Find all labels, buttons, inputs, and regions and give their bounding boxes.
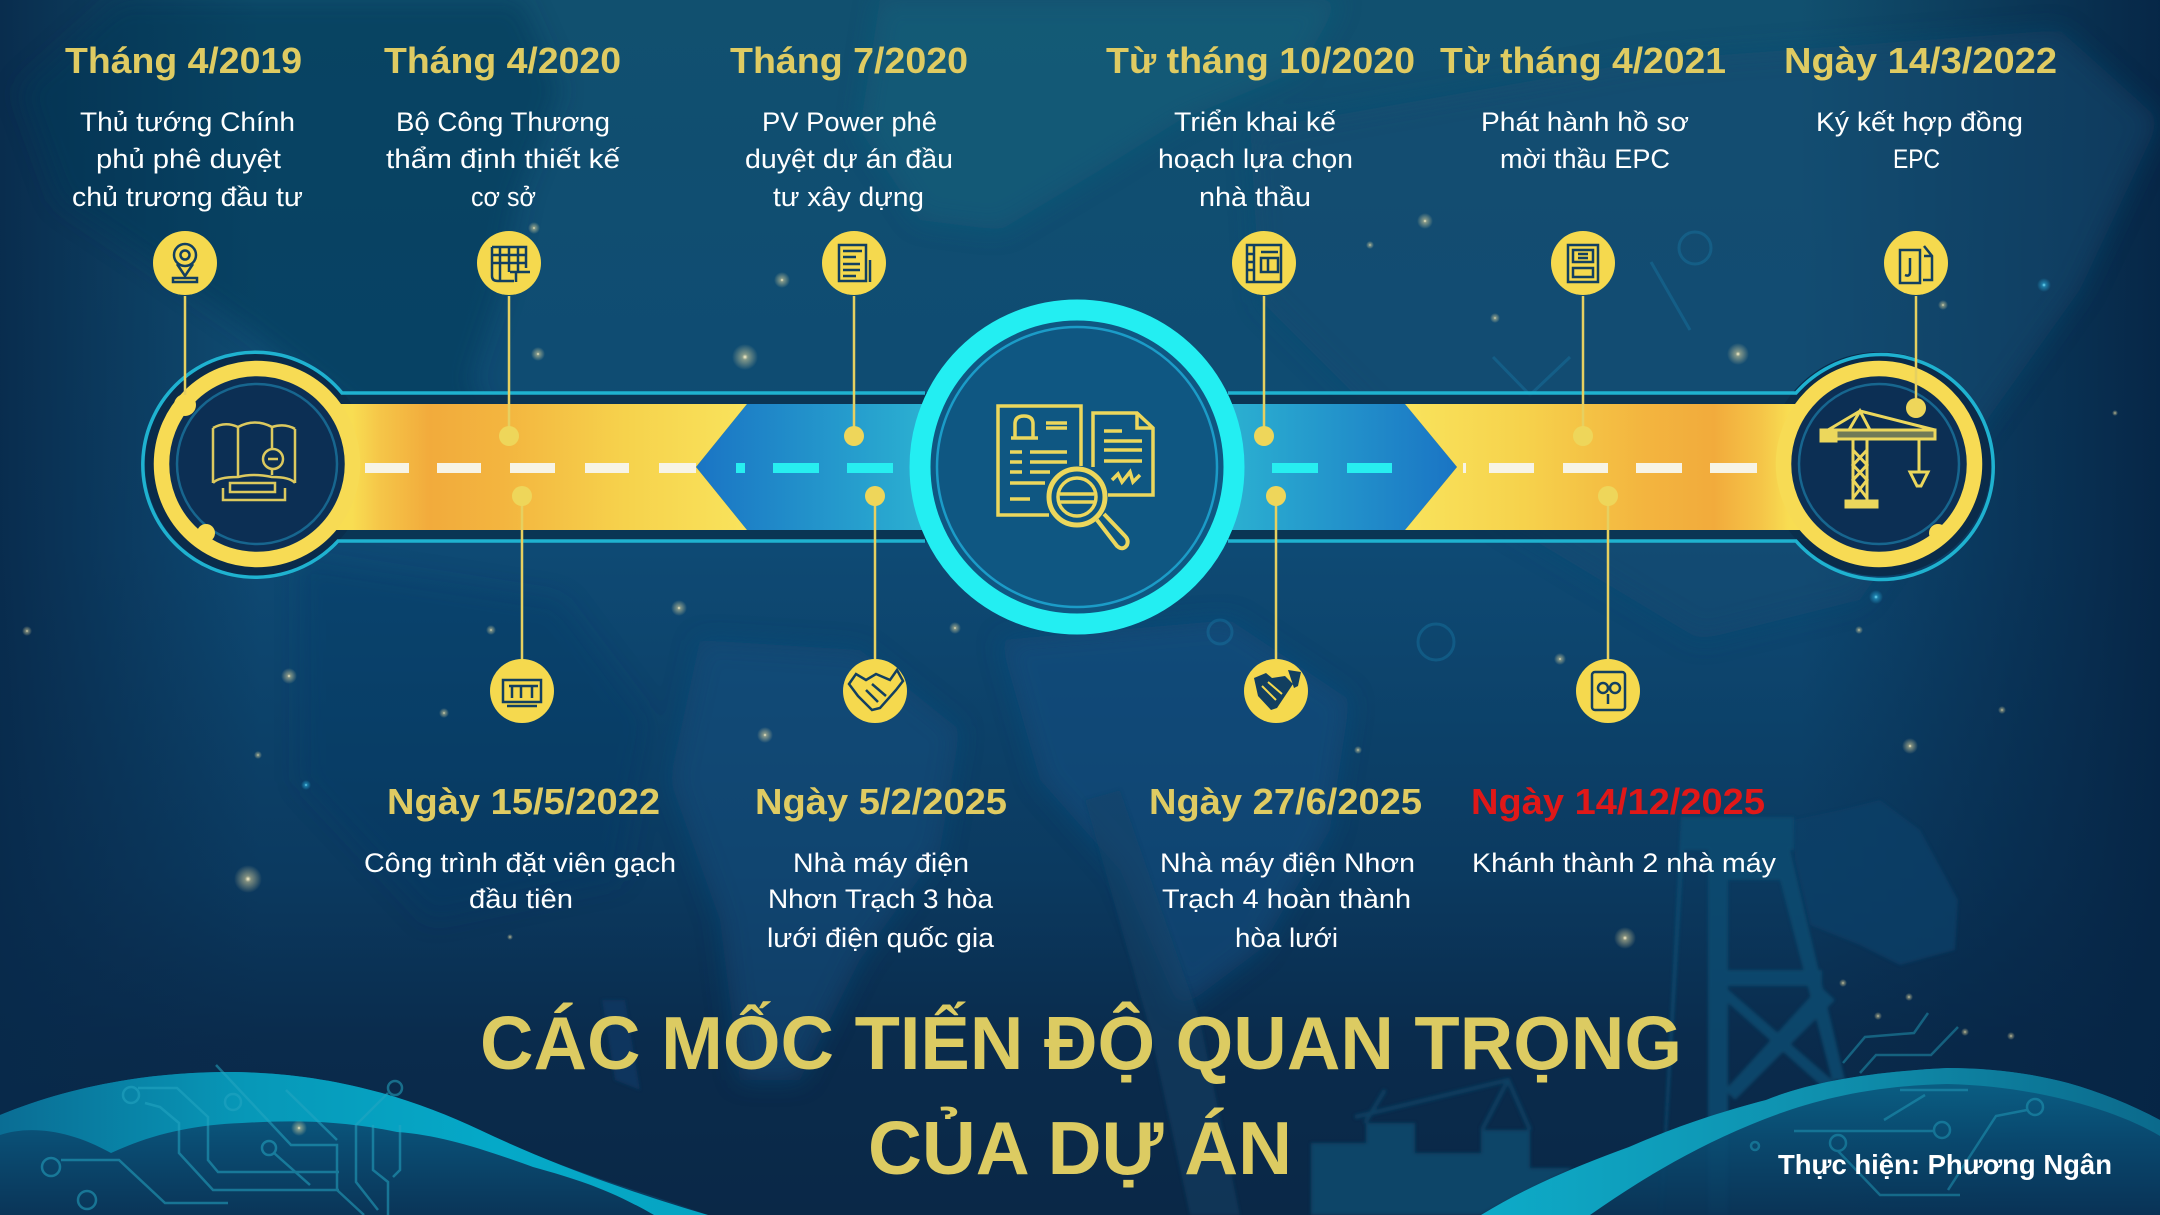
milestone: April 2020: cơ sở [471,182,536,212]
milestone: 14 March 2022 [1784,40,2057,174]
icon: tender dossier [1551,231,1615,295]
icon: map pin approval [153,231,217,295]
milestone: from April 2021 [1440,40,1726,174]
milestone: July 2020: tư xây dựng [773,182,924,212]
timeline bar [143,352,1993,580]
milestone: 14 March 2022: EPC [1893,144,1940,174]
title [480,1001,1682,1190]
milestone: 5 February 2025: Nhơn Trạch 3 hòa [768,884,993,914]
milestone: July 2020: duyệt dự án đầu [745,144,953,174]
icon: power go screen [1576,659,1640,723]
milestone: April 2019: chủ trương đầu tư [72,182,303,212]
milestone: from October 2020: nhà thầu [1199,182,1311,212]
icon: open book [213,422,295,500]
circuit lines [42,1065,402,1215]
milestone: April 2020: Bộ Công Thương [396,107,610,137]
milestone: April 2019: Thủ tướng Chính [80,107,295,137]
milestone: 14 December 2025: Ngày 14/12/2025 [1471,781,1765,822]
wave: bottom left [0,1065,708,1215]
milestone: 15 May 2022: đầu tiên [469,884,573,914]
milestone: April 2020: thẩm định thiết kế [386,144,620,174]
stars [22,213,2118,1040]
milestone: from October 2020: Triển khai kế [1174,107,1336,137]
milestone: 15 May 2022 [364,781,676,914]
left node with book icon [162,368,352,560]
icon: handshake solid [1244,659,1308,723]
central node with document icon [920,310,1234,624]
milestone: from April 2021: mời thầu EPC [1500,144,1670,174]
milestone: 5 February 2025: lưới điện quốc gia [767,923,994,953]
milestone: 14 December 2025: Khánh thành 2 nhà máy [1472,848,1777,878]
milestone: 27 June 2025 [1149,781,1422,953]
milestone: 15 May 2022: Công trình đặt viên gạch [364,848,676,878]
background decoration: australia shape [1793,800,1958,965]
milestone: 5 February 2025 [755,781,1007,953]
milestone: April 2019: phủ phê duyệt [96,144,282,174]
milestone: April 2020: Tháng 4/2020 [384,40,621,81]
wave star [291,1120,307,1136]
author credit: Thực hiện: Phương Ngân [1778,1149,2112,1180]
yellow segment right [1405,404,1805,530]
right node with crane icon [1784,368,1974,560]
city silhouette [602,790,1574,1215]
milestone: 27 June 2025: hòa lưới [1235,923,1338,953]
milestone: 27 June 2025: Ngày 27/6/2025 [1149,781,1422,822]
milestone: April 2019: Tháng 4/2019 [65,40,302,81]
milestone: 15 May 2022: Ngày 15/5/2022 [387,781,660,822]
wave: bottom right [1481,1013,2160,1215]
connector lines [185,296,1926,660]
icon: site grid plan [477,231,541,295]
icon: bidding plan [1232,231,1296,295]
yellow segment left [335,404,747,530]
milestone: from April 2021: Từ tháng 4/2021 [1440,40,1726,81]
milestone: July 2020: PV Power phê [762,107,937,137]
wave highlight band [0,1072,708,1215]
ring base discs [145,352,1991,576]
milestone: 5 February 2025: Nhà máy điện [793,848,969,878]
milestone: 5 February 2025: Ngày 5/2/2025 [755,781,1007,822]
icon: approval document [822,231,886,295]
milestone: 27 June 2025: Nhà máy điện Nhơn [1160,848,1415,878]
milestone: from October 2020 [1106,40,1415,212]
title: CỦA DỰ ÁN [868,1106,1292,1190]
icon: handshake outline [843,659,907,723]
milestone: 27 June 2025: Trạch 4 hoàn thành [1162,884,1411,914]
icon: foundation brick [490,659,554,723]
milestone: April 2020 [384,40,621,212]
background decoration: circles and strokes [1208,232,1711,660]
milestone: 14 March 2022: Ký kết hợp đồng [1816,107,2023,137]
wave highlight band [1481,1068,2160,1215]
blue arrow right [1215,404,1457,530]
milestone: from October 2020: Từ tháng 10/2020 [1106,40,1415,81]
milestone: from October 2020: hoạch lựa chọn [1158,144,1353,174]
icon: documents and magnifier [998,406,1153,548]
blue arrow left [696,404,940,530]
milestone: from April 2021: Phát hành hồ sơ [1481,107,1689,137]
milestone: July 2020 [730,40,968,212]
title: CÁC MỐC TIẾN ĐỘ QUAN TRỌNG [480,1001,1682,1085]
road dashes [365,463,1757,473]
icon: EPC contract signing [1884,231,1948,295]
outer cyan outline [143,352,1993,580]
milestone: 14 March 2022: Ngày 14/3/2022 [1784,40,2057,81]
milestone: 14 December 2025 [1471,781,1777,878]
milestone: April 2019 [65,40,303,212]
tower silhouette [1660,817,1845,1215]
milestone: July 2020: Tháng 7/2020 [730,40,968,81]
circuit lines [1751,1013,2043,1195]
icon: tower crane [1821,411,1935,507]
